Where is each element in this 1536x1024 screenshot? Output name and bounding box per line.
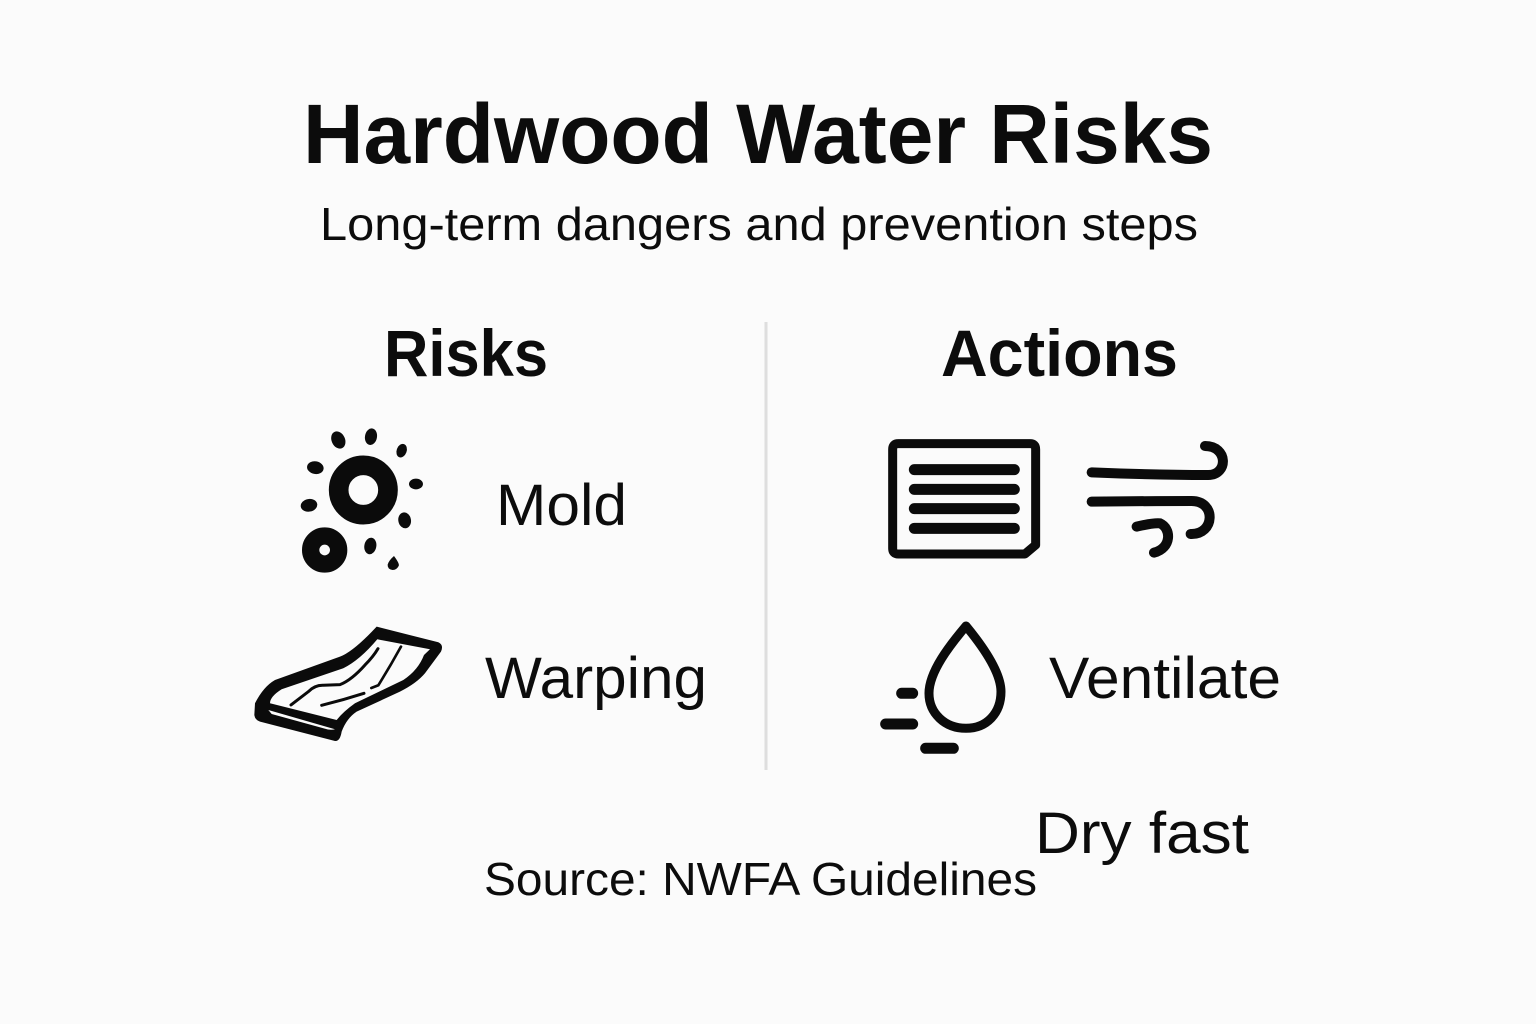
subtitle: Long-term dangers and prevention steps: [320, 198, 1198, 250]
title: Hardwood Water Risks: [303, 87, 1213, 181]
source note: Source: NWFA Guidelines: [484, 853, 1037, 905]
icon: air vent: [893, 444, 1036, 554]
icon: wind: [1092, 446, 1223, 553]
icon: mold spores: [300, 427, 423, 570]
label: dry fast: Dry fast: [1035, 801, 1249, 866]
label: mold: Mold: [496, 473, 627, 538]
icon: warped board: [254, 627, 442, 741]
heading: actions: Actions: [941, 316, 1178, 390]
heading: risks: Risks: [384, 316, 548, 390]
icon: water drop: [886, 626, 1001, 748]
label: warping: Warping: [485, 646, 707, 711]
label: ventilate: Ventilate: [1049, 646, 1281, 711]
